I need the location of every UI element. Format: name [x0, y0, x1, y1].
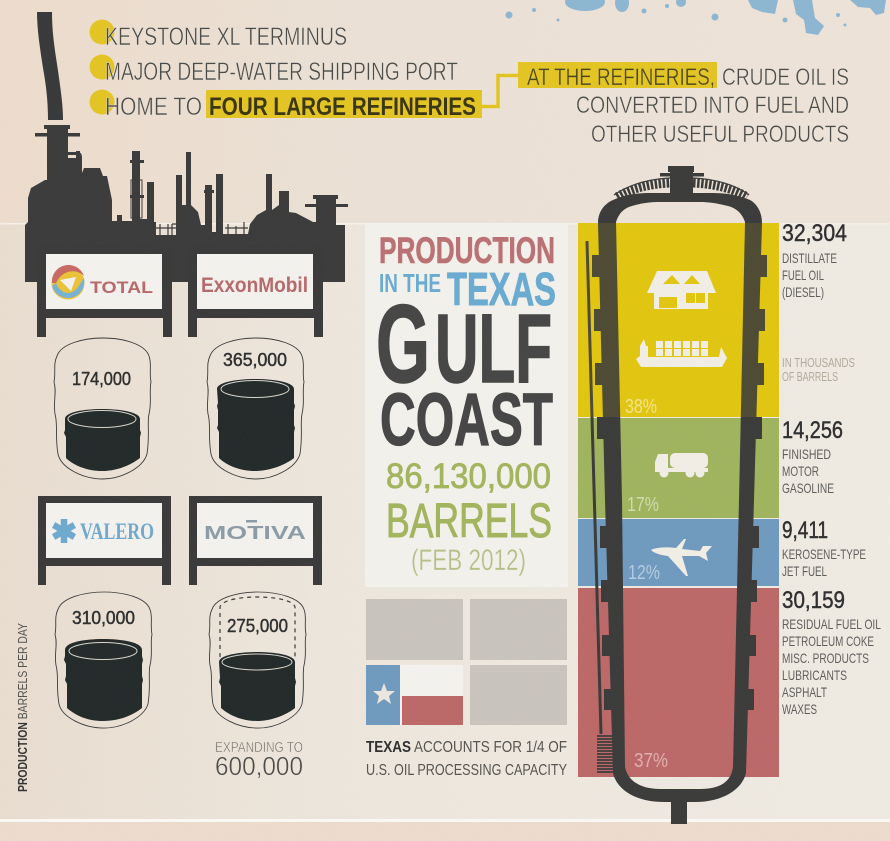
name: JET FUEL [782, 563, 827, 579]
bullet: keystone [90, 20, 114, 44]
distillation tower [586, 166, 767, 824]
date: feb 2012: (FEB 2012) [411, 544, 526, 577]
note line 1 highlighted: AT THE REFINERIES, [527, 64, 715, 91]
fact: home to: HOME TO [105, 93, 202, 121]
total: 86,130,000: 86,130,000 [386, 457, 551, 496]
value 310,000: 310,000 [72, 608, 135, 628]
expansion note [215, 740, 303, 781]
title panel [365, 223, 568, 587]
value 30,159: 30,159 [782, 587, 845, 614]
value 9,411: 9,411 [782, 517, 828, 544]
logo: exxonmobil wordmark: ExxonMobil [201, 274, 308, 297]
gallery railing [614, 178, 749, 195]
logo: valero star [54, 519, 74, 543]
caption line 2: U.S. OIL PROCESSING CAPACITY [366, 762, 567, 779]
barrel: exxonmobil [207, 338, 304, 479]
refinery skyline silhouette [25, 125, 348, 282]
names: LUBRICANTS [782, 667, 847, 683]
axis label: production barrels per day: PRODUCTION BARRELS PER DAY [15, 623, 30, 792]
value 275,000: 275,000 [227, 616, 288, 636]
names: ASPHALT [782, 684, 827, 700]
bullet: port [90, 54, 114, 80]
label: 17%: 17% [627, 494, 659, 516]
bullet: refineries [90, 90, 114, 114]
logo: total globe [52, 265, 84, 300]
title: in the: IN THE [379, 268, 441, 298]
barrel fill [64, 639, 143, 721]
title: texas: TEXAS [447, 263, 556, 315]
segment: jet fuel [578, 519, 779, 586]
tower left trays [592, 255, 614, 710]
highlight: at the refineries [518, 62, 717, 88]
label: 37%: 37% [634, 750, 668, 772]
sign: exxonmobil [188, 246, 323, 337]
barrel: total [54, 338, 151, 479]
connector to refineries note [482, 76, 518, 106]
barrel: motiva [209, 592, 306, 728]
total: barrels: BARRELS [386, 495, 552, 548]
value 174,000: 174,000 [72, 369, 131, 389]
legend: distillate [782, 220, 847, 300]
logo: motiva wordmark: MOTIVA [204, 523, 306, 543]
title: coast: COAST [380, 378, 553, 461]
name: MOTOR [782, 463, 819, 479]
barrel fill [64, 409, 141, 471]
value 32,304: 32,304 [782, 220, 847, 247]
pipeline into refinery [37, 12, 63, 120]
name: DISTILLATE [782, 250, 837, 266]
refineries note [518, 62, 849, 148]
heater coil [597, 736, 613, 772]
icon: tanker truck [655, 453, 708, 478]
barrel: valero [55, 592, 152, 728]
name: GASOLINE [782, 480, 834, 496]
key facts list [90, 20, 518, 121]
name: FINISHED [782, 446, 831, 462]
legend: jet fuel [782, 517, 866, 579]
expansion outline [220, 597, 295, 657]
tower base stem [671, 800, 687, 824]
name: FUEL OIL [782, 267, 824, 283]
icon: house [647, 271, 716, 309]
caption line 1: TEXAS ACCOUNTS FOR 1/4 OF [366, 739, 567, 756]
title: gulf ULF: ULF [435, 294, 552, 403]
title: gulf G: G [376, 283, 430, 406]
names: WAXES [782, 701, 817, 717]
value 365,000: 365,000 [223, 350, 287, 370]
label: 38%: 38% [625, 396, 657, 418]
one-in-four flag graphic [366, 599, 567, 725]
legend: other products [782, 587, 881, 717]
barrel fill [217, 379, 295, 471]
name: (DIESEL) [782, 284, 824, 300]
sign: total [37, 246, 172, 337]
texas flag [366, 665, 463, 725]
segment: distillate [578, 223, 779, 417]
legend: gasoline [782, 417, 843, 496]
sign: motiva [189, 496, 322, 585]
feed rod [586, 241, 602, 734]
segment: gasoline [578, 418, 779, 518]
note line 1: CRUDE OIL IS [722, 64, 849, 91]
note: in thousands of barrels: OF BARRELS [782, 369, 838, 384]
sign: valero [38, 496, 171, 585]
barrel fill [219, 652, 296, 721]
segment: other [578, 588, 779, 777]
title: production: PRODUCTION [379, 230, 555, 271]
ink splatter top right [506, 0, 886, 35]
stacked product column [578, 223, 779, 777]
fact: shipping port: MAJOR DEEP-WATER SHIPPING PORT [105, 58, 458, 86]
tower cap [670, 170, 693, 196]
logo: valero wordmark: VALERO [80, 519, 154, 544]
tower right trays [745, 255, 767, 710]
value 14,256: 14,256 [782, 417, 843, 444]
fact: four large refineries: FOUR LARGE REFINERIES [209, 93, 476, 121]
texas capacity caption [366, 739, 567, 779]
icon: airplane [651, 539, 712, 576]
logo: total wordmark: TOTAL [90, 278, 153, 297]
expanding to: EXPANDING TO [215, 740, 303, 756]
label: 12%: 12% [628, 562, 660, 584]
icon: container ship [636, 339, 727, 367]
note: in thousands of barrels: IN THOUSANDS [782, 355, 855, 370]
600,000: 600,000 [215, 751, 303, 781]
highlight: four large refineries [206, 90, 482, 118]
fact: keystone xl terminus: KEYSTONE XL TERMINUS [105, 23, 347, 51]
